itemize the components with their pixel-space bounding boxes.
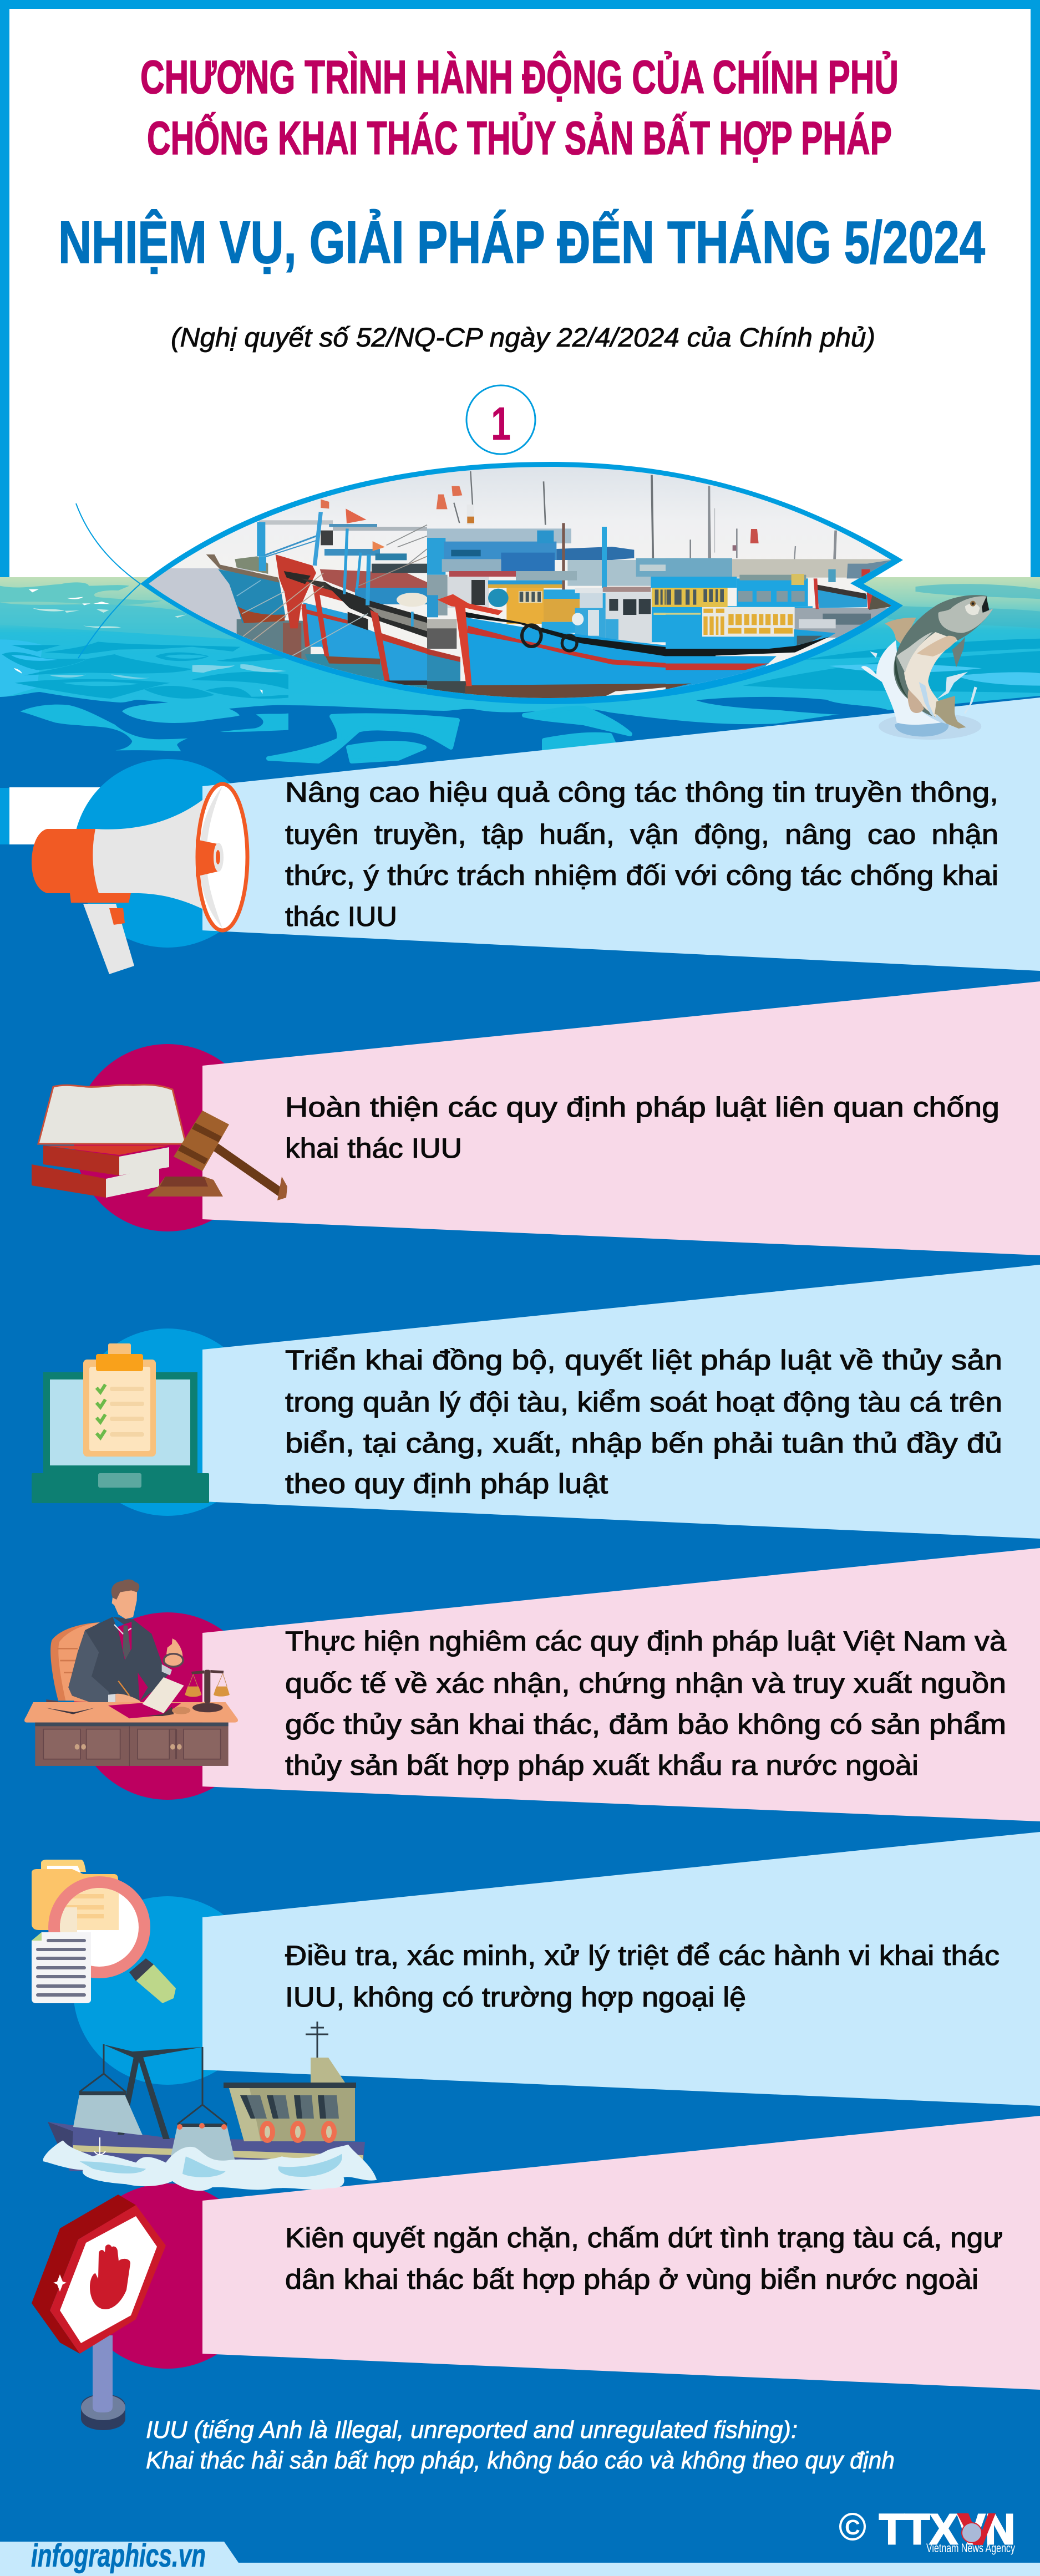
website label: infographics.vn (31, 2538, 206, 2574)
icon: official at desk (24, 1580, 238, 1766)
icon: folder, magnifier and document (32, 1860, 176, 2003)
hull B (303, 603, 380, 658)
red net and back deck (320, 569, 427, 593)
icon: jumping salmon (861, 595, 993, 740)
text block 4: Thực hiện nghiêm các quy định pháp luật Việt Nam và (285, 1626, 1006, 1657)
middle boat prow (276, 554, 316, 628)
panel 5 (73, 1832, 1040, 2106)
text block 1: thác IUU (285, 901, 397, 932)
footer bar (0, 2542, 1040, 2576)
text block 5 (285, 1940, 1000, 2013)
left boat (218, 569, 286, 623)
copyright and agency logo: C (845, 2516, 860, 2539)
text block 5: IUU, không có trường hợp ngoại lệ (285, 1982, 746, 2013)
back rigging (259, 520, 333, 525)
left hull C (427, 619, 456, 649)
text block 2: Hoàn thiện các quy định pháp luật liên quan chống (285, 1092, 1000, 1123)
icon: books and gavel (32, 1085, 287, 1200)
masts and far boats (690, 486, 836, 571)
right far boat and water (794, 608, 894, 638)
text block 3: theo quy định pháp luật (285, 1468, 608, 1499)
footnote (146, 2416, 895, 2474)
text block 5: Điều tra, xác minh, xử lý triệt để các hành vi khai thác (285, 1940, 1000, 1971)
far dock (636, 558, 716, 577)
text block 4: thủy sản bất hợp pháp xuất khẩu ra nước ngoài (285, 1750, 919, 1781)
header panel (0, 0, 1040, 580)
yellow cabin (488, 581, 562, 586)
text block 1: Nâng cao hiệu quả công tác thông tin truyền thông, (285, 777, 998, 808)
number badge: 1 (491, 398, 511, 450)
footnote: Khai thác hải sản bất hợp pháp, không báo cáo và không theo quy định (146, 2447, 895, 2474)
hull C (383, 639, 427, 681)
big blue cabin (651, 577, 716, 588)
text block 3 (285, 1345, 1002, 1499)
copyright and agency logo: TTXVN (879, 2506, 1015, 2553)
red prow (437, 594, 503, 615)
number badge (466, 385, 535, 454)
text block 6 (285, 2222, 1003, 2295)
panel 4 (74, 1548, 1040, 1821)
upper deck (427, 528, 571, 543)
text block 4: gốc thủy sản khai thác, đảm bảo không có sản phẩm (285, 1709, 1006, 1740)
flags (321, 500, 329, 508)
text block 3: Triển khai đồng bộ, quyết liệt pháp luật về thủy sản (285, 1345, 1002, 1376)
fish outline (140, 462, 903, 704)
subtitle: (Nghị quyết số 52/NQ-CP ngày 22/4/2024 của Chính phủ) (171, 323, 875, 353)
fish tail lines (76, 503, 140, 658)
left water (149, 568, 253, 641)
blue posts (344, 528, 412, 627)
text block 3: biển, tại cảng, xuất, nhập bến phải tuân thủ đầy đủ (285, 1428, 1002, 1459)
text block 1: thức, ý thức trách nhiệm đối với công tác chống khai (285, 860, 998, 891)
icon: megaphone (32, 784, 247, 974)
icon: fishing trawler (43, 2022, 377, 2191)
main hull (465, 617, 716, 686)
fish photo: fishing boats (149, 467, 891, 698)
hull (666, 637, 829, 658)
footnote: IUU (tiếng Anh là Illegal, unreported and unregulated fishing): (146, 2416, 798, 2443)
text block 1: tuyên truyền, tập huấn, vận động, nâng cao nhận (285, 819, 998, 850)
red awning and white cabin (449, 571, 516, 577)
white wheelhouse (575, 588, 653, 593)
text block 3: trong quản lý đội tàu, kiểm soát hoạt động tàu cá trên (285, 1387, 1002, 1418)
sea background (0, 577, 1040, 724)
text block 6: dân khai thác bất hợp pháp ở vùng biển nước ngoài (285, 2264, 978, 2295)
icon: stop sign (32, 2195, 166, 2430)
text block 2 (285, 1092, 1000, 1164)
text block 4 (285, 1626, 1006, 1781)
title (58, 51, 985, 276)
panel 2 (74, 981, 1040, 1255)
left light blue water (0, 639, 43, 699)
dark waves (0, 692, 1040, 801)
panel 6 (75, 2116, 1040, 2390)
text block 4: quốc tế về xác nhận, chứng nhận và truy xuất nguồn (285, 1668, 1006, 1699)
text block 2: khai thác IUU (285, 1133, 462, 1164)
panel 3 (74, 1265, 1040, 1539)
panel 1 (0, 698, 1040, 971)
text block 6: Kiên quyết ngăn chặn, chấm dứt tình trạng tàu cá, ngư (285, 2222, 1003, 2253)
text block 1 (285, 777, 998, 932)
main cabin (666, 577, 737, 588)
icon: laptop checklist (32, 1343, 209, 1503)
masts (454, 471, 710, 558)
mooring ropes (237, 556, 427, 658)
